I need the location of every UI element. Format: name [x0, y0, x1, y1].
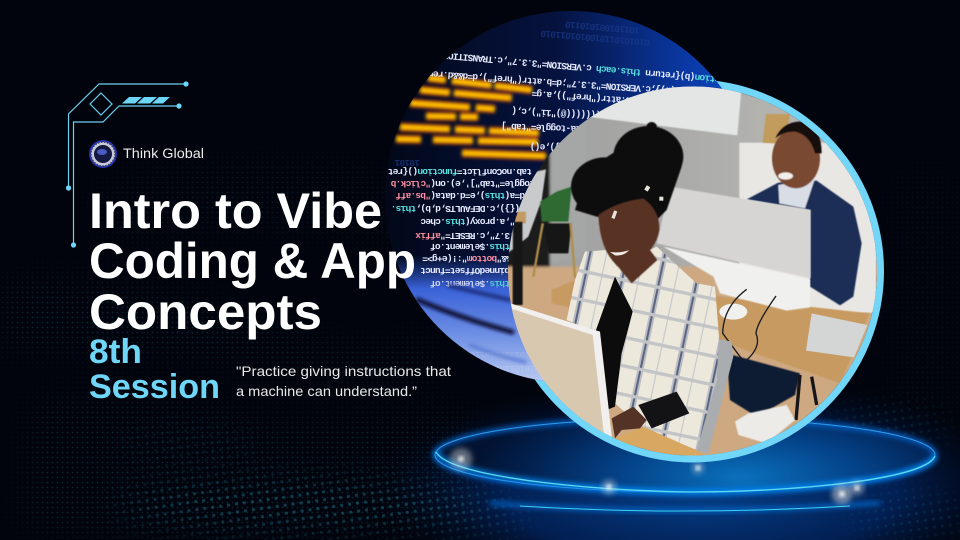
circular photo ring: [504, 83, 880, 459]
quote: [236, 363, 451, 399]
faint binary digits: 1010100101101010100101: [420, 349, 530, 360]
title: Coding & App: [89, 233, 416, 289]
man's shoes: [735, 405, 795, 443]
rotated code lines: tab.noConflict=function(){ret: [388, 166, 532, 177]
desk legs: [796, 375, 817, 420]
office photo circle: [508, 86, 877, 456]
rotated code lines: this.element=a(b)};c.VERSION="3.3.7";d=b.attr("href"),d=d&&d.replace: [408, 66, 745, 101]
faint binary digits: 0101010110100101011010: [540, 27, 650, 48]
rotated code lines: "in"}),e(): [530, 141, 580, 153]
brand name: Think Global: [123, 146, 204, 161]
man's face: [772, 128, 820, 188]
woman's sleeve cuff: [638, 392, 689, 428]
woman's black top: [596, 277, 633, 410]
plant pot: [763, 114, 790, 144]
rotated code lines: b.closest("li"),c.a.(((((((@)"1i"),c,(: [512, 105, 700, 126]
man's hair: [775, 122, 822, 153]
rotated code lines: toggle="tab"]',e).on("click.b: [390, 178, 535, 189]
foreground monitor: [510, 304, 612, 437]
foreground desk: [615, 426, 703, 456]
logo: Think Global globe badge: [89, 140, 117, 168]
man's shirt: [778, 178, 815, 208]
woman's smile: [610, 250, 629, 256]
hair clips: [611, 185, 663, 219]
woman's hand: [612, 407, 647, 438]
man's suit: [747, 181, 862, 305]
title: [89, 183, 416, 340]
whiteboard: [590, 86, 742, 136]
session label: Session: [89, 368, 220, 406]
rotated code lines: bnd({}),c.DEFAULTS,d,b),this.: [391, 203, 535, 214]
rotated code lines: pinnedOffset=funct: [421, 265, 510, 276]
wall and room: [508, 86, 877, 456]
rotated code lines: ("target")d.b(a)||(d=b.attr("href")),a.g=: [531, 88, 735, 113]
session label: 8th: [89, 333, 142, 371]
quote: a machine can understand.”: [236, 383, 417, 399]
tablet on desk: [806, 313, 867, 357]
background: dark technology field: [2, 152, 960, 540]
woman's jacket: [567, 247, 719, 450]
man's legs: [727, 353, 800, 417]
rotated code lines: b-d=a(this),e=d.data("bs.aff: [395, 190, 535, 201]
faint binary digits: 0101011010010101: [460, 363, 540, 374]
woman: [567, 122, 719, 450]
rotated code lines: this.$element.of: [430, 241, 510, 252]
monitor base: [663, 247, 810, 311]
man: [747, 122, 862, 305]
woman's chair: [695, 338, 733, 453]
woman's neck and face: [598, 198, 659, 283]
man's smile: [778, 172, 793, 180]
faint binary digits: [394, 18, 650, 374]
orange highlighted code bars: [396, 78, 546, 156]
faint binary digits: 101101001010110: [564, 18, 640, 36]
stand and cables: [719, 289, 776, 363]
glowing portal rings: [435, 418, 935, 511]
blurred keyboard streaks: [418, 286, 525, 362]
faint binary digits: 10101: [394, 157, 420, 168]
left chair, plant and side table: [503, 169, 575, 305]
rotated code lines: api-",a.proxy(this.chec: [420, 216, 535, 227]
rotated code lines: function(b){return this.each c.VERSION="3.3.7",c.TRANSITION: [442, 49, 735, 86]
monitor back: [657, 187, 811, 278]
code photo circle: [380, 5, 770, 390]
rotated code lines: &&"bottom":!(e+g>=: [422, 253, 512, 264]
title: Concepts: [89, 284, 322, 340]
HUD line decoration: [66, 81, 189, 248]
title: Intro to Vibe: [89, 183, 382, 239]
rotated code lines: this.$element.of: [430, 278, 510, 289]
desk: [552, 280, 869, 383]
woman's hair: [571, 122, 683, 223]
session label: [89, 333, 220, 406]
quote: "Practice giving instructions that: [236, 363, 451, 379]
rotated code lines: [388, 54, 717, 288]
white cabinet: [739, 143, 876, 313]
rotated code lines: c.prototype.show='["data-toggle="tab"]: [502, 120, 690, 138]
rotated code lines: "3.3.7",c.RESET="affix: [415, 230, 525, 241]
